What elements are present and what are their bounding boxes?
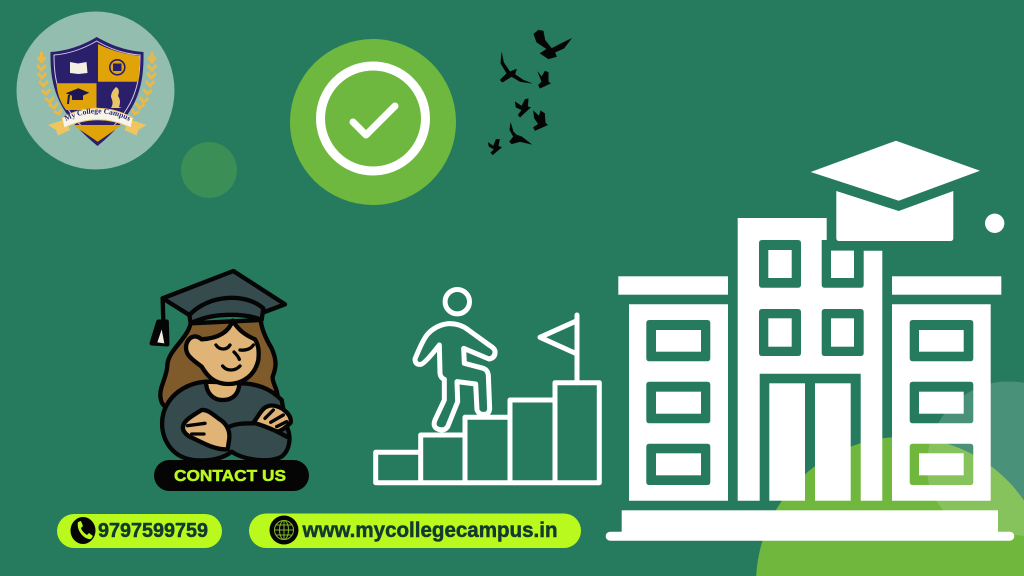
left hand fingers — [187, 423, 205, 434]
icon: college building with graduation cap — [606, 141, 1014, 541]
contact us label: CONTACT US — [174, 468, 286, 485]
graduation cap — [811, 141, 980, 241]
body — [162, 382, 289, 460]
icon: laurel wreath — [38, 53, 156, 114]
ribbon banner — [48, 108, 146, 136]
website pill — [249, 514, 581, 548]
icon: temple seal — [110, 60, 125, 75]
logo text: My College Campus — [64, 108, 130, 121]
person body — [415, 324, 495, 430]
hair — [160, 320, 277, 407]
neck — [206, 382, 239, 400]
hand left — [183, 410, 229, 449]
phone pill — [57, 514, 222, 548]
phone number: 9797599759 — [98, 520, 208, 542]
icon: globe — [270, 516, 298, 544]
right hand fingers — [265, 410, 287, 427]
steps — [376, 383, 599, 483]
icon: statue — [111, 87, 122, 108]
tassel — [152, 298, 167, 344]
background circle: translucent light — [927, 381, 1024, 536]
upper birds — [500, 30, 572, 88]
face — [186, 321, 259, 384]
logo: My College Campus crest — [16, 12, 174, 170]
contact us pill — [154, 460, 309, 491]
icon: shield — [50, 37, 144, 146]
central tower — [738, 218, 882, 501]
decorative small circle — [181, 142, 237, 198]
icon: flock of birds — [488, 30, 572, 155]
right wing — [892, 276, 1001, 501]
icon: green check badge — [290, 39, 456, 205]
person head — [445, 290, 469, 314]
icon: person climbing steps to flag — [376, 290, 599, 483]
arm — [229, 423, 287, 437]
icon: book — [70, 62, 88, 74]
flag — [540, 315, 577, 383]
lower birds — [488, 99, 548, 155]
hand right — [253, 406, 291, 432]
plinth — [606, 510, 1014, 541]
decorative white dot — [985, 214, 1004, 233]
face features — [216, 345, 253, 370]
background circle: green — [756, 437, 1024, 576]
icon: graduate girl hugging herself — [152, 271, 291, 460]
left wing — [618, 276, 728, 501]
cap — [163, 271, 285, 323]
icon: phone — [70, 517, 96, 544]
doors — [769, 383, 851, 501]
icon: mortarboard — [66, 88, 89, 104]
website address: www.mycollegecampus.in — [302, 519, 558, 542]
